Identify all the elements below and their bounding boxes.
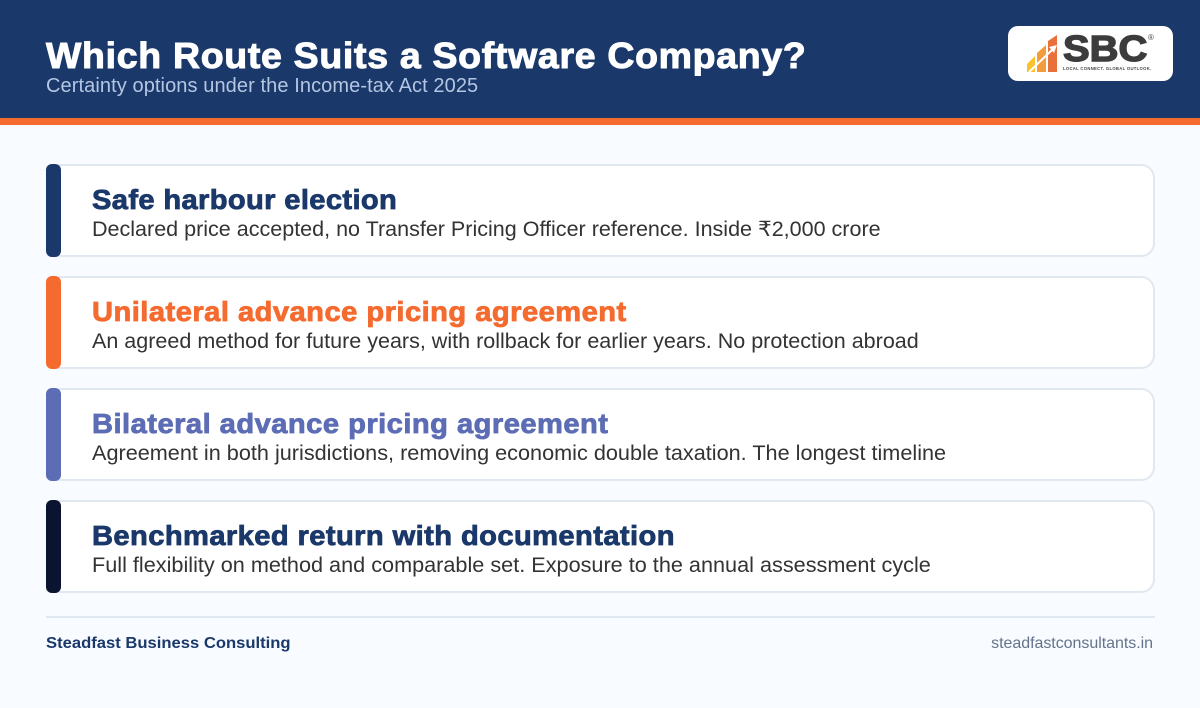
accent bar: [46, 164, 61, 257]
panel: bilateral APA: [46, 388, 1155, 481]
accent bar: [46, 388, 61, 481]
subtitle: Certainty options under the Income-tax Act 2025: [46, 75, 478, 97]
description: Declared price accepted, no Transfer Pricing Officer reference. Inside ₹2,000 crore: [92, 218, 881, 241]
accent stripe: [0, 118, 1200, 125]
heading: Safe harbour election: [92, 184, 397, 215]
icon: rising bars with arrow: [1027, 35, 1057, 72]
description: Agreement in both jurisdictions, removing economic double taxation. The longest timeline: [92, 442, 946, 465]
footer: organisation name: Steadfast Business Consulting: [46, 635, 291, 652]
accent bar: [46, 500, 61, 593]
title: Which Route Suits a Software Company?: [46, 35, 806, 76]
description: An agreed method for future years, with rollback for earlier years. No protection abroad: [92, 330, 919, 353]
panel: benchmarked return: [46, 500, 1155, 593]
logo wordmark: SBC: [1063, 28, 1147, 69]
heading: Unilateral advance pricing agreement: [92, 296, 627, 327]
header band: [0, 0, 1200, 125]
heading: Benchmarked return with documentation: [92, 520, 675, 551]
logo: [1008, 26, 1173, 81]
heading: Bilateral advance pricing agreement: [92, 408, 608, 439]
logo registered mark: ®: [1148, 33, 1154, 42]
footer: website: steadfastconsultants.in: [991, 635, 1153, 652]
panel: unilateral APA: [46, 276, 1155, 369]
accent bar: [46, 276, 61, 369]
logo tagline: LOCAL CONNECT. GLOBAL OUTLOOK.: [1063, 66, 1152, 71]
panel: safe harbour: [46, 164, 1155, 257]
description: Full flexibility on method and comparable set. Exposure to the annual assessment cycle: [92, 554, 931, 577]
